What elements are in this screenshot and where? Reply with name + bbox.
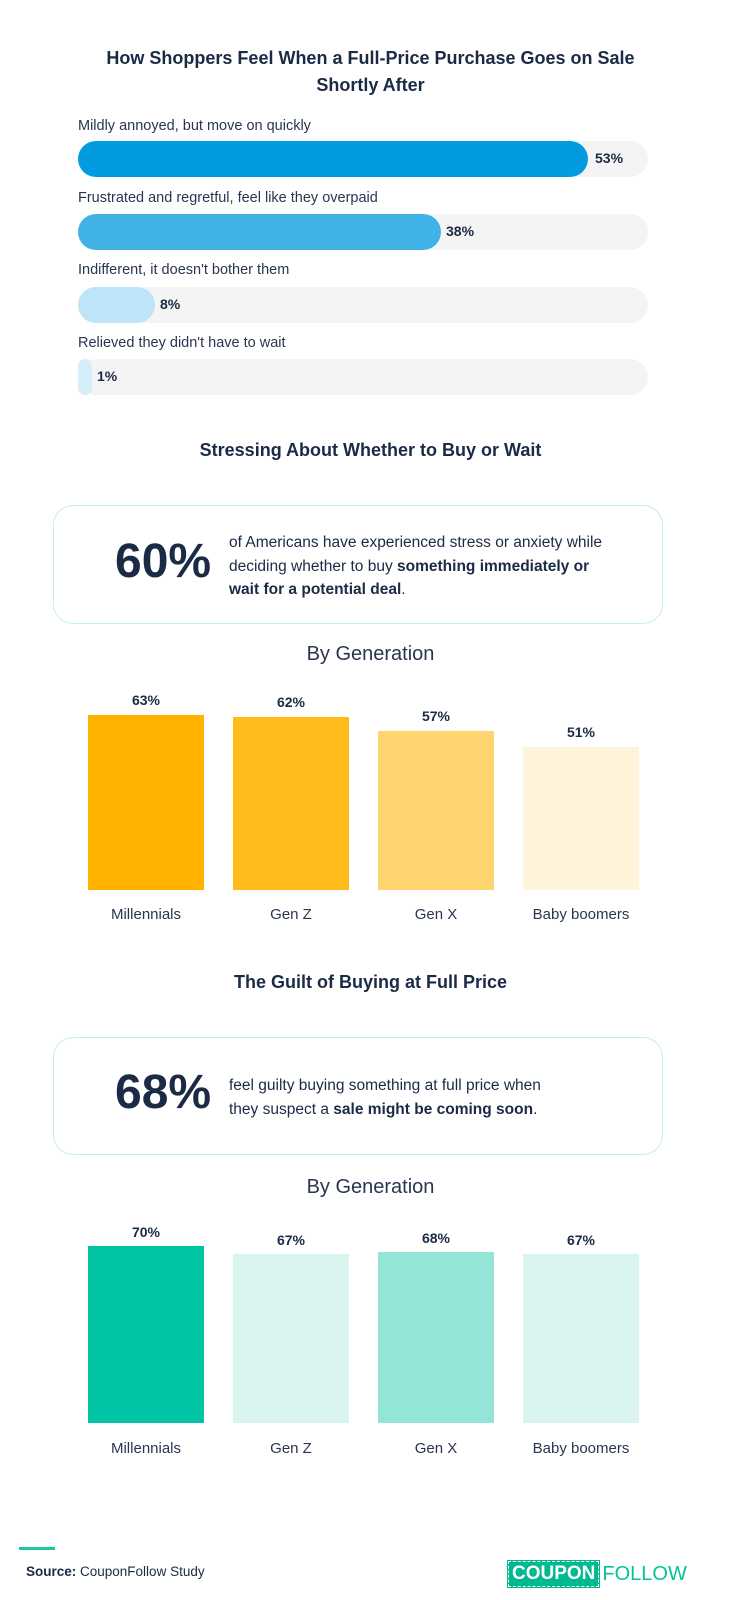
logo (507, 1560, 687, 1588)
bar 8% (78, 287, 648, 323)
subheading: By Generation (307, 1176, 434, 1198)
bar 53% (78, 141, 648, 177)
column chart: guilt by generation: 68% (422, 1230, 450, 1246)
column chart: stress by generation: Millennials (111, 906, 181, 923)
column chart: guilt by generation: Baby boomers (533, 1440, 629, 1457)
bar 1% (78, 359, 648, 395)
column chart: stress by generation: 57% (422, 708, 450, 724)
bar 8%: 8% (160, 296, 180, 312)
stat 60%: 60% (115, 535, 211, 588)
logo: COUPON (512, 1563, 595, 1584)
bar chart: feelings (78, 118, 648, 395)
column chart: stress by generation: Gen Z (270, 906, 312, 923)
bar 38%: 38% (446, 223, 474, 239)
title: How Shoppers Feel When a Full-Price Purchase Goes on Sale (106, 48, 635, 68)
column chart: stress by generation (88, 692, 639, 923)
column chart: guilt by generation: Gen Z (270, 1440, 312, 1457)
column chart: stress by generation: Gen X (415, 906, 457, 923)
bar 38% (78, 214, 648, 250)
callout: 68% (53, 1037, 663, 1155)
column chart: guilt by generation: Gen X (415, 1440, 457, 1457)
subheading: By Generation (307, 643, 434, 665)
column chart: guilt by generation: 70% (132, 1224, 160, 1240)
stat 68%: 68% (115, 1066, 211, 1119)
bar 53%: 53% (595, 150, 623, 166)
column chart: stress by generation: Baby boomers (533, 906, 629, 923)
column chart: guilt by generation: Millennials (111, 1440, 181, 1457)
stat text: of Americans have experienced stress or anxiety while deciding whether to buy something immediately or wait for a potential deal. (229, 534, 602, 598)
bar 1%: 1% (97, 368, 117, 384)
label 3: Indifferent, it doesn't bother them (78, 262, 289, 278)
source: Source: CouponFollow Study (26, 1564, 205, 1579)
column chart: stress by generation: 62% (277, 694, 305, 710)
column chart: guilt by generation (88, 1224, 639, 1457)
title (106, 48, 635, 95)
heading: stress: Stressing About Whether to Buy or Wait (200, 440, 541, 460)
column chart: stress by generation: 63% (132, 692, 160, 708)
label 4: Relieved they didn't have to wait (78, 335, 286, 351)
column chart: stress by generation: 51% (567, 724, 595, 740)
label 2: Frustrated and regretful, feel like they overpaid (78, 190, 378, 206)
heading: guilt: The Guilt of Buying at Full Price (234, 972, 507, 992)
title: Shortly After (316, 75, 425, 95)
stat text: feel guilty buying something at full price when they suspect a sale might be coming soon. (229, 1077, 541, 1118)
footer accent line (19, 1547, 55, 1550)
label 1: Mildly annoyed, but move on quickly (78, 118, 311, 134)
logo: FOLLOW (602, 1562, 687, 1584)
callout: 60% (53, 505, 663, 624)
column chart: guilt by generation: 67% (277, 1232, 305, 1248)
column chart: guilt by generation: 67% (567, 1232, 595, 1248)
